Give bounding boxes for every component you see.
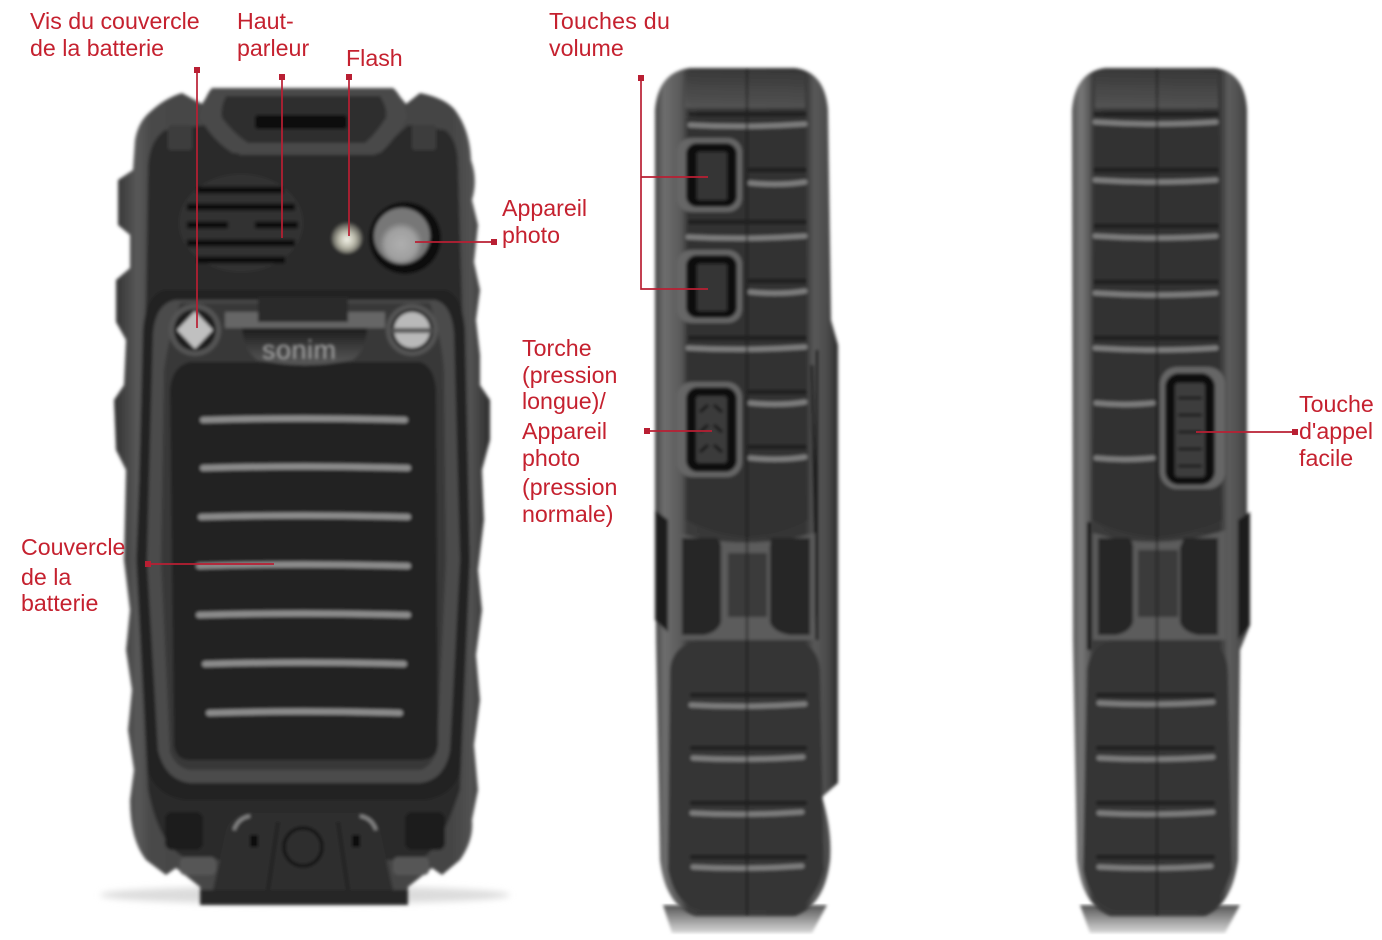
belt clip window	[678, 533, 815, 640]
phone: front/back view	[100, 88, 510, 905]
notch on right edge	[1238, 512, 1250, 640]
phone body and housing	[114, 88, 490, 905]
torch button	[677, 382, 742, 477]
label: Torche / Appareil photo: (pression	[522, 362, 617, 388]
label: Touche d'appel facile: facile	[1299, 445, 1353, 471]
centre seam	[746, 68, 748, 916]
top cap	[1095, 72, 1218, 108]
cover ribs	[199, 418, 408, 713]
base shadow	[1080, 905, 1240, 933]
cover outer frame	[137, 290, 470, 800]
label: Couvercle de la batterie	[21, 534, 274, 616]
earpiece housing	[200, 88, 407, 153]
base shadow	[663, 905, 827, 933]
label: Haut-parleur: Haut-	[237, 8, 294, 34]
label: Haut-parleur	[237, 8, 309, 238]
label: Couvercle de la batterie: de la	[21, 564, 71, 590]
label: Appareil photo: photo	[502, 222, 560, 248]
label: Vis du couvercle de la batterie	[30, 8, 200, 328]
label: Torche / Appareil photo: longue)/	[522, 388, 606, 414]
label: Appareil photo	[415, 195, 587, 248]
flash	[332, 223, 362, 253]
logo badge	[242, 328, 367, 365]
label: Vis du couvercle de la batterie: de la batterie	[30, 35, 164, 61]
rear plate	[812, 350, 817, 640]
label: Touche d'appel facile	[1196, 391, 1374, 471]
label: Touches du volume	[549, 8, 708, 289]
volume buttons	[677, 138, 742, 323]
ribs	[1095, 114, 1217, 868]
side body	[655, 68, 838, 916]
battery cover panel	[170, 362, 438, 760]
phone: left side view	[655, 68, 838, 933]
label: Torche / Appareil photo: photo	[522, 445, 580, 471]
label: Couvercle de la batterie: batterie	[21, 590, 98, 616]
inner dark body	[136, 125, 470, 860]
label: Torche / Appareil photo	[522, 335, 712, 527]
top cap	[685, 72, 805, 108]
screws	[169, 304, 221, 356]
notch on left edge	[655, 510, 668, 632]
label: Flash	[346, 45, 403, 236]
label: Touche d'appel facile: Touche	[1299, 391, 1374, 417]
centre seam	[1156, 68, 1158, 916]
latch	[225, 312, 385, 328]
label: Torche / Appareil photo: Appareil	[522, 418, 607, 444]
side body	[1072, 68, 1250, 916]
label: Couvercle de la batterie: Couvercle	[21, 534, 125, 560]
label: Torche / Appareil photo: (pression	[522, 474, 617, 500]
lower grip	[668, 640, 824, 910]
dark centre panel	[1092, 113, 1222, 537]
label: Flash: Flash	[346, 45, 403, 71]
label: Touches du volume: Touches du	[549, 8, 670, 34]
label: Touche d'appel facile: d'appel	[1299, 418, 1373, 444]
belt clip window	[1093, 530, 1226, 640]
floor shadow	[100, 886, 510, 904]
dark centre panel	[686, 113, 808, 537]
label: Torche / Appareil photo: normale)	[522, 501, 614, 527]
phone: right side view	[1072, 68, 1250, 933]
logo text: sonim	[262, 335, 337, 365]
ribs	[688, 114, 805, 868]
lower grip	[1083, 640, 1232, 910]
camera	[369, 202, 441, 274]
label: Touches du volume: volume	[549, 35, 624, 61]
label: Torche / Appareil photo: Torche	[522, 335, 592, 361]
label: Vis du couvercle de la batterie: Vis du couvercle	[30, 8, 200, 34]
easy-call button	[1160, 367, 1225, 489]
label: Haut-parleur: parleur	[237, 35, 309, 61]
speaker grille	[179, 174, 303, 272]
label: Appareil photo: Appareil	[502, 195, 587, 221]
bottom connector	[213, 813, 393, 890]
